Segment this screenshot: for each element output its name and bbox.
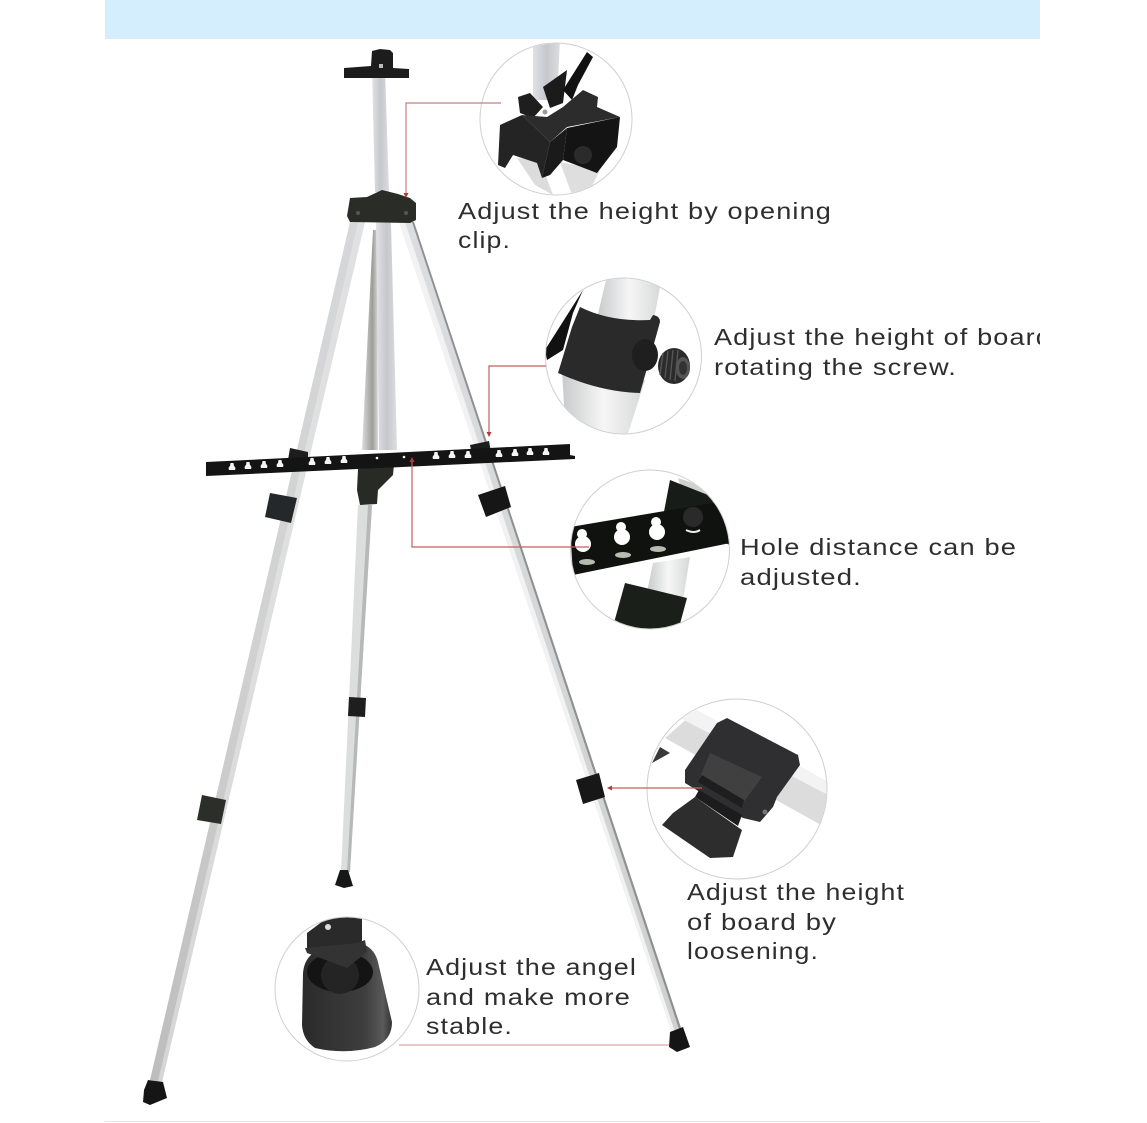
- tray bracket right: [470, 441, 491, 454]
- callout line: rotating screw: [486, 366, 546, 437]
- callout line: flip clip: [607, 786, 702, 790]
- left foot: [143, 1080, 167, 1105]
- detail circle: rotating screw: [545, 276, 702, 437]
- caption: adjust the angel: [426, 954, 637, 1039]
- detail circle: flip clip: [647, 699, 830, 879]
- detail circle: tray holes: [570, 470, 735, 635]
- left lower leg collar: [197, 795, 226, 824]
- right lower leg collar: [576, 773, 605, 804]
- caption: hole distance: [740, 534, 1017, 590]
- caption: adjust height of board by loosening: loosening.: [687, 938, 819, 964]
- caption: adjust the angel: stable.: [426, 1013, 513, 1039]
- rear leg behind the mast: [362, 230, 378, 450]
- caption: adjust height by opening clip: Adjust the height by opening: [458, 198, 832, 224]
- caption: adjust height of board rotating the screw: rotating the screw.: [714, 354, 957, 380]
- left front leg: [150, 222, 365, 1082]
- caption: adjust height of board by loosening: of board by: [687, 909, 837, 935]
- right upper leg collar: [478, 486, 511, 517]
- center foot: [335, 870, 353, 888]
- top banner band: [105, 0, 1040, 39]
- detail circle: rubber foot: [275, 915, 419, 1061]
- bottom hairline: [105, 1121, 1040, 1122]
- caption: adjust height by opening clip: [458, 198, 832, 253]
- horizontal tray with holes: [206, 444, 575, 476]
- detail circle: top clip: [480, 40, 632, 195]
- callout line: tray holes: [410, 457, 589, 547]
- right front leg: [399, 222, 682, 1033]
- callout line: rubber foot: [399, 1044, 669, 1046]
- easel mast upper: [372, 70, 389, 192]
- right foot: [669, 1027, 690, 1052]
- easel illustration: [143, 49, 690, 1105]
- caption: adjust the angel: and make more: [426, 984, 631, 1010]
- top bracket: [344, 49, 409, 78]
- tray bracket left: [288, 448, 308, 460]
- callout line: height clip: [404, 103, 501, 198]
- left upper leg collar: [265, 493, 297, 523]
- caption: adjust height of board by loosening: Adjust the height: [687, 879, 905, 905]
- caption: adjust height of board rotating the screw: [714, 328, 1040, 380]
- height clamp collar: [347, 190, 416, 223]
- caption: adjust height of board rotating the screw: Adjust the height of board: [714, 324, 1052, 350]
- center rear leg lower: [341, 505, 372, 872]
- caption: hole distance: Hole distance can be: [740, 534, 1017, 560]
- center leg collar: [348, 697, 366, 717]
- caption: adjust the angel: Adjust the angel: [426, 954, 637, 980]
- caption: adjust height by opening clip: clip.: [458, 227, 511, 253]
- caption: adjust height of board by loosening: [687, 879, 905, 964]
- mast lower section: [376, 222, 397, 450]
- caption: hole distance: adjusted.: [740, 564, 862, 590]
- center clamp below the tray: [357, 464, 394, 505]
